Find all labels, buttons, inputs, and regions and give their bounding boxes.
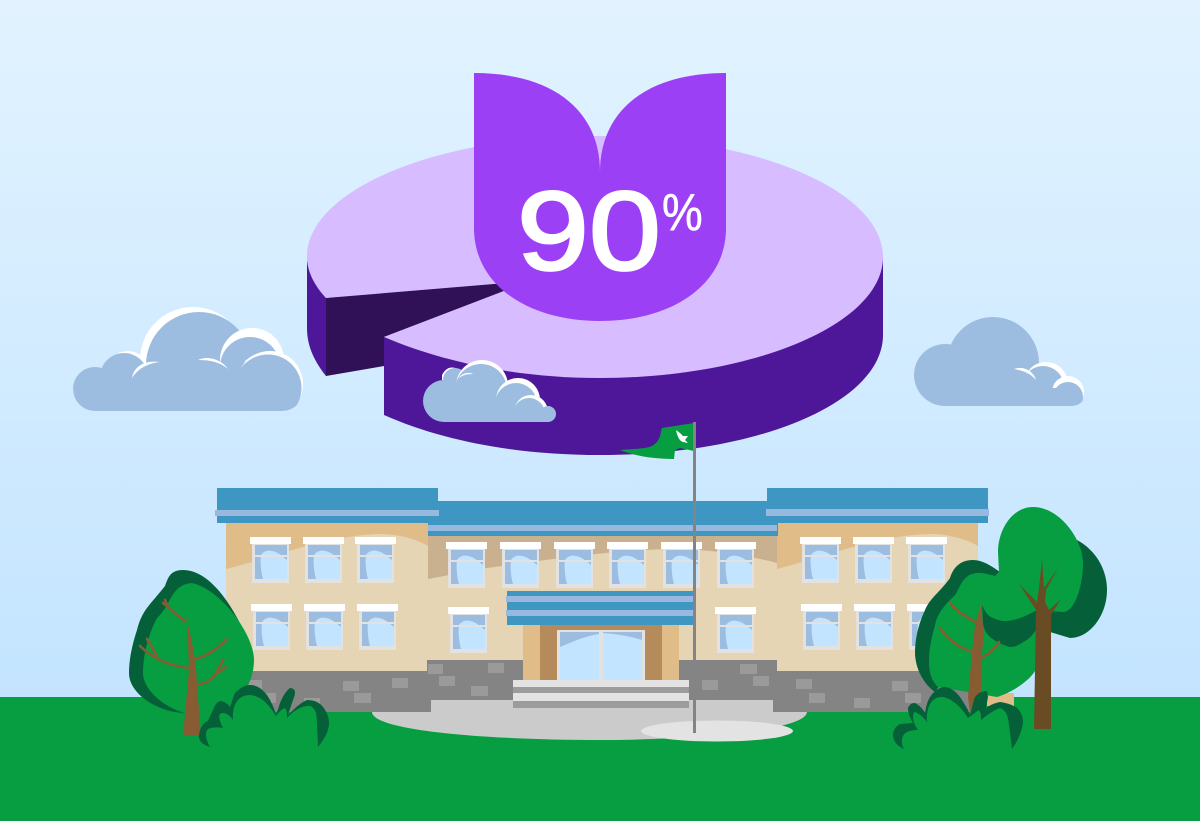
cloud highlights bbox=[1014, 368, 1036, 380]
entrance canopy bbox=[506, 591, 693, 625]
pie top face bbox=[307, 136, 883, 378]
wall: right wing bbox=[777, 523, 978, 673]
value: 90%: 90 bbox=[517, 168, 661, 294]
cloud highlights bbox=[458, 373, 473, 379]
windows bbox=[250, 537, 948, 653]
school building bbox=[215, 488, 1014, 740]
wall: centre block bbox=[428, 530, 777, 661]
tree: front right trunk bbox=[940, 603, 999, 713]
pavement bbox=[372, 700, 807, 740]
flagpole and flag bbox=[620, 422, 696, 733]
pie cut inner wall bbox=[326, 268, 520, 376]
tree: left bbox=[129, 570, 254, 736]
roof: left bbox=[215, 488, 439, 523]
flag bbox=[620, 423, 694, 459]
ground bbox=[0, 697, 1200, 821]
tree: tall right trunk bbox=[1019, 559, 1061, 729]
pie front side wall bbox=[384, 257, 883, 455]
cloud: on pie bbox=[423, 360, 556, 422]
cloud: left bbox=[73, 307, 303, 422]
entrance steps bbox=[513, 680, 689, 708]
tree: front right back outline bbox=[915, 560, 1000, 692]
tulip badge bbox=[474, 73, 726, 321]
value: 90%: % bbox=[662, 184, 703, 242]
shrub: right bbox=[893, 687, 1023, 775]
trees: right foliage bbox=[929, 507, 1083, 697]
roof: right bbox=[766, 488, 989, 523]
pole bbox=[693, 422, 696, 733]
icon: dove bbox=[676, 430, 688, 443]
pie chart bbox=[307, 73, 883, 455]
tree: front right crescent shadow bbox=[982, 605, 1037, 647]
stone base bbox=[226, 660, 975, 712]
cloud: right bbox=[914, 317, 1084, 412]
tree trunk and branches bbox=[140, 597, 227, 736]
roof: centre bbox=[428, 501, 778, 536]
cloud highlights bbox=[132, 353, 258, 378]
flagpole base bbox=[641, 720, 793, 742]
tree: tall right back foliage bbox=[1040, 534, 1107, 638]
pie left side wall bbox=[307, 257, 326, 376]
entrance bbox=[523, 622, 679, 682]
wall: left wing bbox=[226, 523, 428, 673]
shrub: left bbox=[199, 685, 329, 770]
wall: back annex bbox=[987, 693, 1014, 706]
